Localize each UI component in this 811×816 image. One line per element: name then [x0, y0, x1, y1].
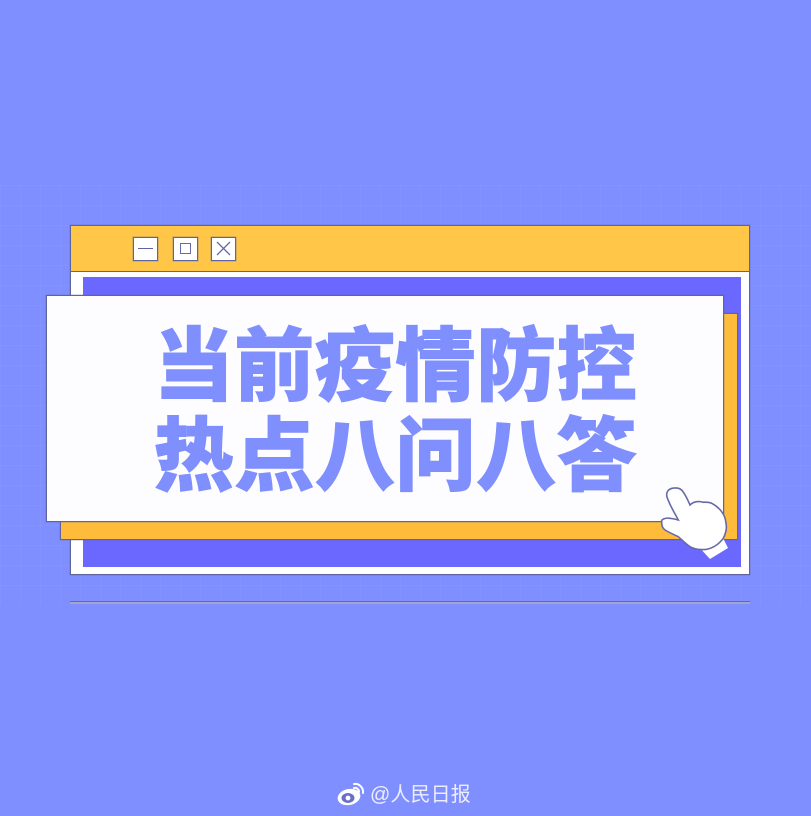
icon: weibo	[338, 782, 364, 806]
white title card	[46, 295, 724, 522]
title bar	[71, 226, 749, 272]
title line 1: 当前疫情防控	[154, 302, 637, 418]
inner purple panel	[83, 277, 741, 567]
baseline rule	[70, 601, 750, 604]
title line 2: 热点八问八答	[154, 392, 637, 508]
wrist cuff	[698, 536, 728, 559]
orange back card	[60, 313, 738, 540]
button: maximize	[173, 237, 198, 261]
watermark text: @人民日报	[370, 784, 471, 806]
watermark	[338, 782, 471, 806]
window frame	[70, 225, 750, 575]
button: close	[211, 237, 236, 261]
icon: pointing hand	[660, 487, 728, 559]
button: minimize	[133, 237, 158, 261]
